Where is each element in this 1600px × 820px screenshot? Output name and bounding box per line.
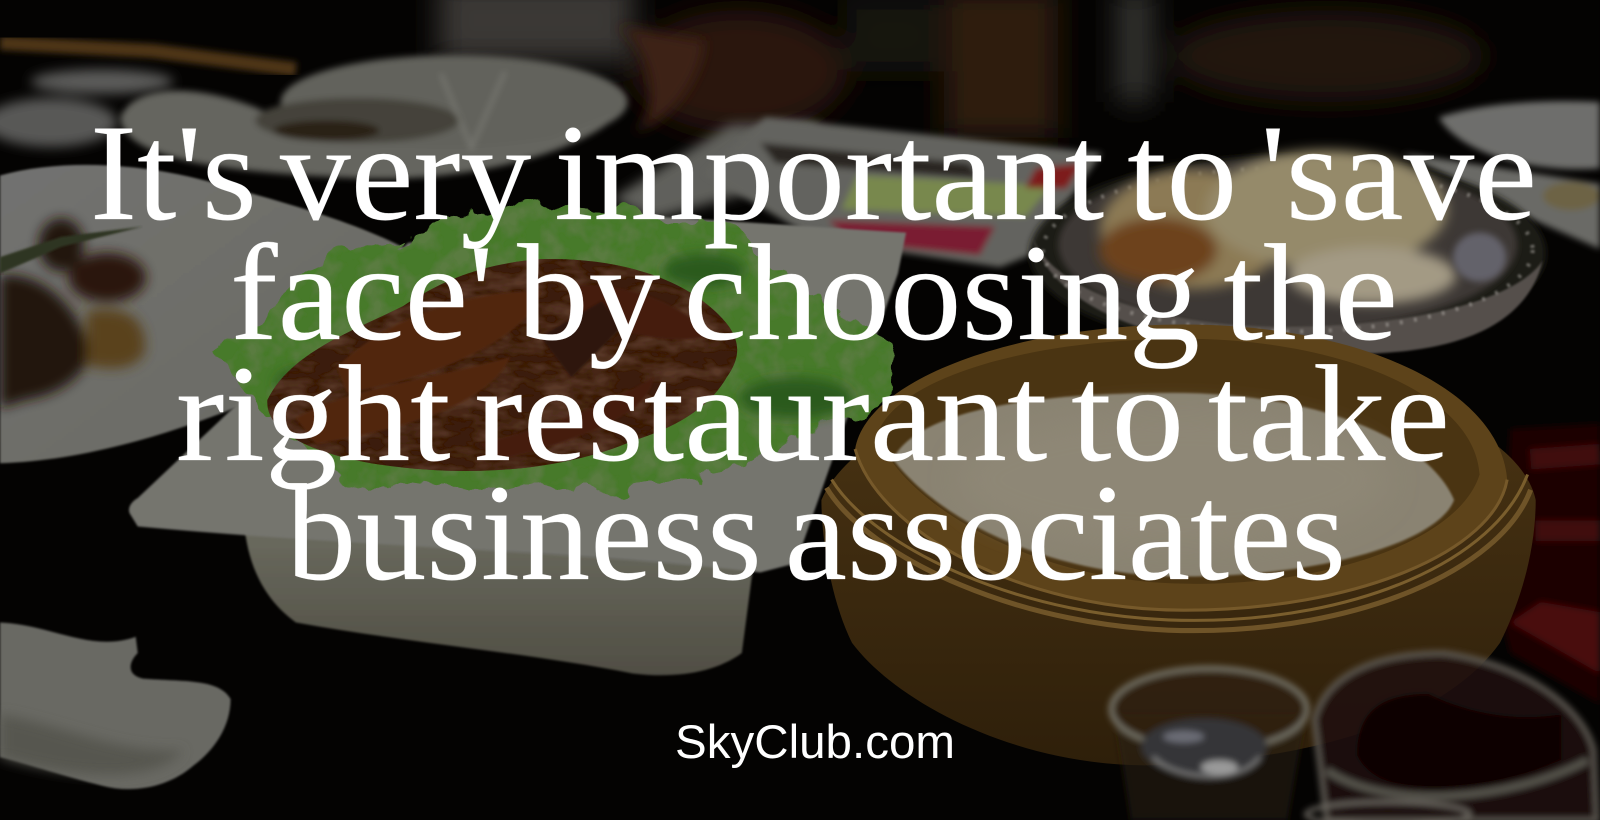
- upper plate: [120, 55, 628, 179]
- small dishes top left: [0, 69, 173, 147]
- website credit: SkyClub.com: [675, 715, 955, 768]
- left shot glass: [1111, 668, 1307, 820]
- title line 2: face' by choosing the: [230, 216, 1398, 369]
- bamboo steamer inner ring: [855, 324, 1507, 610]
- chopstick rest and wood: [0, 43, 296, 69]
- background diners and drinks: [439, 0, 1485, 138]
- wine glass: [441, 71, 505, 148]
- right shot glass: [1306, 653, 1597, 820]
- right plate: [1403, 101, 1600, 249]
- square plate base: [245, 531, 753, 675]
- sauce dish with condiments: [704, 117, 1102, 267]
- bamboo steamer outer: [821, 324, 1536, 765]
- bread basket: [1030, 150, 1546, 354]
- red lacquer box at right: [1500, 423, 1600, 704]
- title: [90, 96, 1537, 609]
- sliced duck: [267, 259, 737, 471]
- lettuce: [214, 206, 900, 490]
- ceramic spoon rest bottom left: [0, 622, 231, 789]
- square plate: [129, 216, 906, 572]
- title line 3: right restaurant to take: [176, 337, 1450, 490]
- hand on the left: [617, 26, 704, 133]
- rear plate behind lettuce: [612, 122, 816, 219]
- title line 4: business associates: [286, 456, 1346, 609]
- title line 1: It's very important to 'save: [90, 96, 1537, 249]
- left plate with food: [0, 165, 410, 463]
- rolled pancakes: [893, 393, 1454, 577]
